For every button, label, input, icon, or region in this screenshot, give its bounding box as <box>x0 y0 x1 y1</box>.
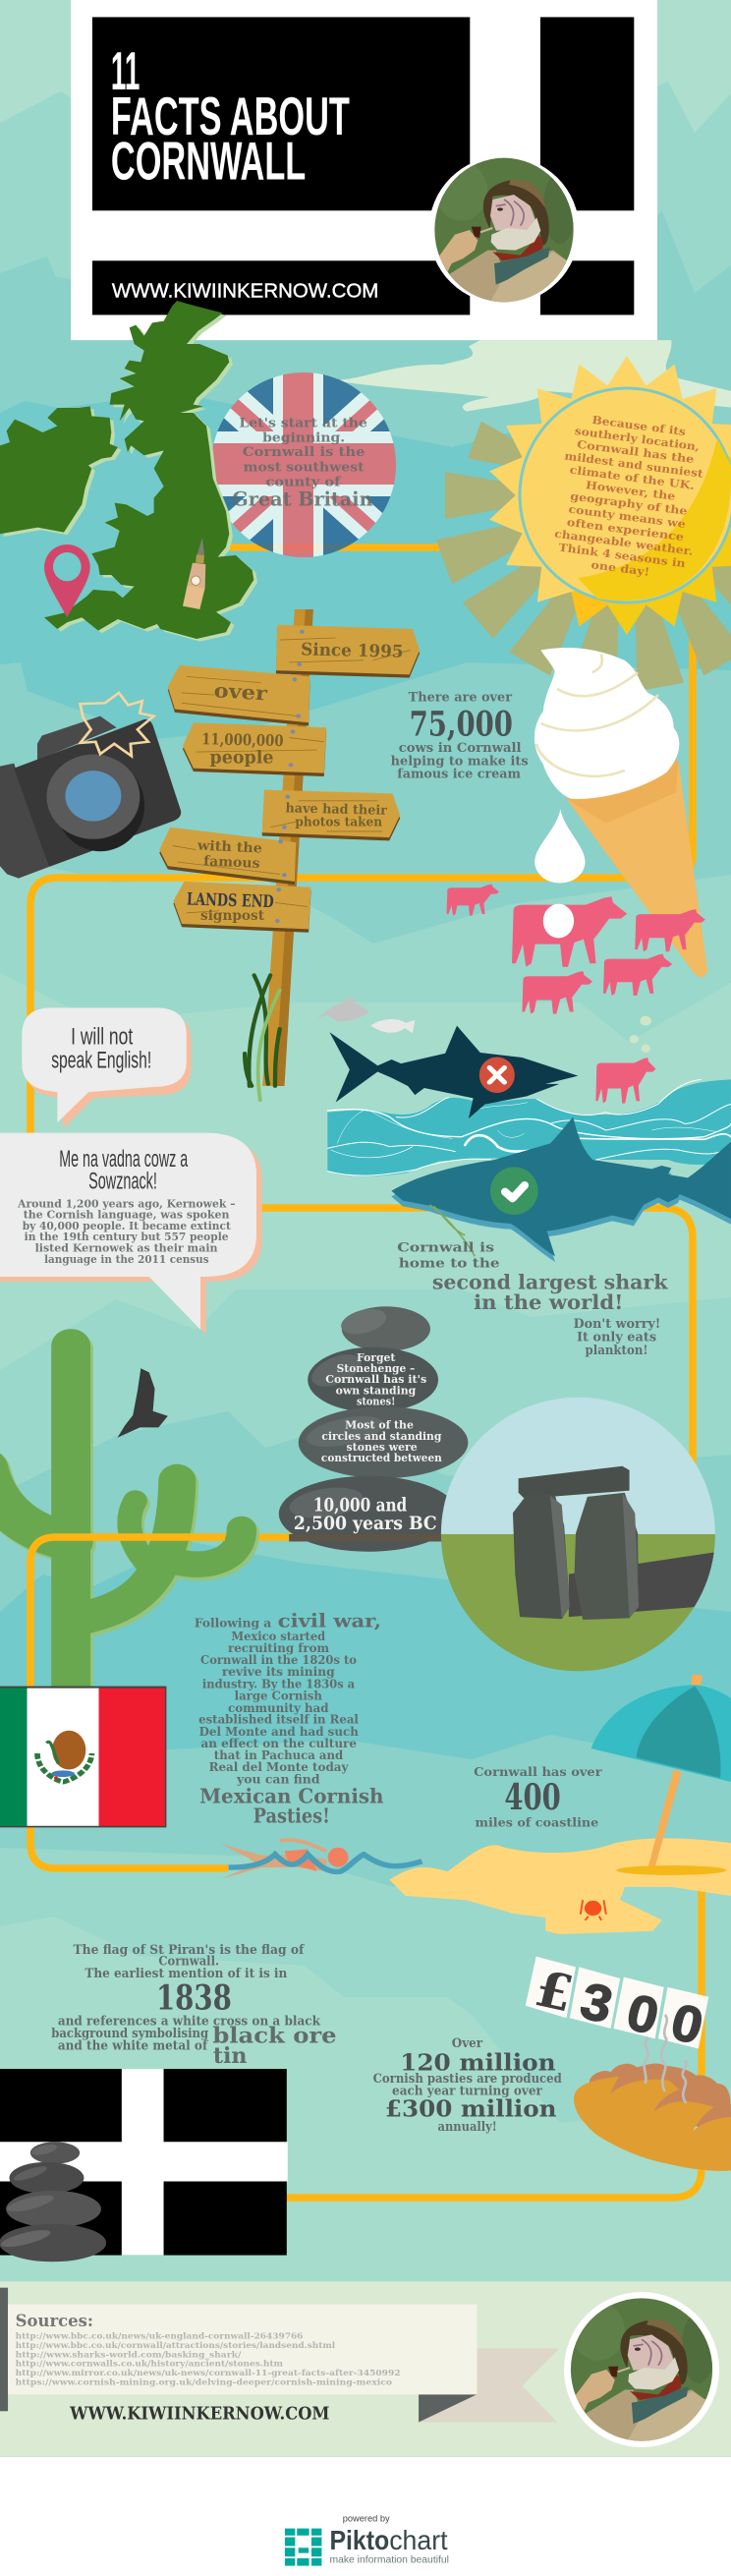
pasties text: Cornish pasties are produced <box>373 2071 562 2087</box>
speech bubble: I will not speak English <box>22 1007 192 1128</box>
mexico text: industry. By the 1830s a <box>202 1678 356 1691</box>
cows text: There are over <box>409 690 512 705</box>
sign: since 1995: Since 1995 <box>301 640 404 661</box>
plankton weed <box>429 1205 475 1256</box>
icon: Big Ben <box>183 538 205 609</box>
speech bubble: I will not speak English: speak English! <box>51 1048 151 1073</box>
stones text: stones! <box>357 1395 395 1407</box>
sign: over: over <box>213 679 268 706</box>
footer website: WWW.KIWIINKERNOW.COM <box>69 2404 329 2424</box>
pasties text: annually! <box>438 2119 497 2135</box>
icon: tick <box>490 1167 538 1215</box>
st pirans flag text: black ore <box>212 2023 337 2049</box>
st pirans flag text: background symbolising <box>51 2026 209 2041</box>
stones text: Stonehenge – <box>337 1362 415 1375</box>
wordmark: chart <box>389 2526 448 2556</box>
speech bubble: Me na vadna cowz a Sowznack: Sowznack! <box>88 1169 157 1194</box>
st pirans flag text: The flag of St Piran's is the flag of <box>73 1942 306 1958</box>
shark text: second largest shark <box>432 1271 668 1294</box>
st pirans flag text: and the white metal of <box>58 2038 208 2053</box>
mexico text: recruiting from <box>228 1642 329 1656</box>
basking shark with tick <box>391 1117 731 1262</box>
union flag text: beginning. <box>262 431 345 445</box>
coastline text <box>474 1765 603 1830</box>
Cornish language paragraph: the Cornish language, was spoken <box>24 1208 230 1221</box>
price cards: 300 pounds: 0 <box>621 1984 664 2045</box>
stones text: Cornwall has it's <box>325 1373 427 1386</box>
sun text: one day! <box>590 558 650 579</box>
st pirans flag text <box>51 1942 337 2069</box>
union flag text <box>232 416 373 511</box>
sources list <box>16 2312 401 2387</box>
mexico text <box>195 1610 384 1828</box>
union flag text: county of <box>265 475 341 489</box>
camera <box>0 693 181 879</box>
pasties text: £300 million <box>385 2095 557 2122</box>
mexico text: established itself in Real <box>198 1713 359 1727</box>
sign: have had their photos taken <box>262 790 400 840</box>
union flag text: most southwest <box>244 460 365 475</box>
sun text: changeable weather. <box>554 528 694 558</box>
orange line over cactus <box>30 1537 225 1573</box>
stones text: 2,500 years BC <box>294 1513 437 1534</box>
steam <box>645 2015 687 2103</box>
Cornish language paragraph: in the 19th century but 557 people <box>25 1231 229 1243</box>
sources list: http://www.mirror.co.uk/news/uk-news/cornwall-11-great-facts-after-3450992 <box>16 2369 401 2378</box>
mexico text: civil war, <box>278 1610 381 1631</box>
grass <box>245 975 280 1100</box>
wordmark: make information beautiful <box>329 2554 449 2565</box>
umbrella <box>591 1674 731 1867</box>
cows text: famous ice cream <box>397 767 521 781</box>
sign: over <box>168 665 310 726</box>
stones text: Most of the <box>345 1418 414 1431</box>
title: CORNWALL <box>111 132 306 191</box>
union flag text: Let's start at the <box>239 416 367 430</box>
icon: eagle emblem <box>37 1731 91 1782</box>
footer portrait <box>564 2292 719 2447</box>
stones text: 10,000 and <box>313 1495 407 1516</box>
shark text: Cornwall is <box>397 1240 494 1255</box>
ribbon <box>419 2348 559 2422</box>
st pirans flag text: tin <box>213 2042 248 2069</box>
price cards: 300 pounds <box>526 1957 708 2055</box>
waves <box>327 1079 731 1176</box>
shark text: Don't worry! <box>574 1317 660 1332</box>
mexico text: Cornwall in the 1820s to <box>200 1654 357 1668</box>
coastline text: miles of coastline <box>476 1815 598 1830</box>
coastline text: 400 <box>504 1777 561 1818</box>
crab <box>581 1900 606 1920</box>
wordmark: Pikto <box>329 2526 389 2556</box>
sun text: county means we <box>568 503 687 531</box>
st pirans flag <box>0 2069 288 2261</box>
mexico text: Mexican Cornish <box>199 1785 384 1808</box>
sun text: Think 4 seasons in <box>558 542 686 570</box>
sun text: However, the <box>585 479 676 503</box>
title <box>111 42 350 191</box>
sign: with the famous: famous <box>203 853 260 872</box>
coastline text: Cornwall has over <box>474 1765 603 1779</box>
wordmark <box>329 2526 449 2565</box>
title: FACTS ABOUT <box>111 86 350 146</box>
mexico text: large Cornish <box>235 1689 322 1703</box>
st pirans flag text: 1838 <box>156 1977 232 2018</box>
sign: with the famous <box>159 828 296 885</box>
orange route line <box>30 547 702 2198</box>
mexico text: revive its mining <box>222 1666 335 1680</box>
Cornish language paragraph: by 40,000 people. It became extinct <box>23 1220 231 1232</box>
speech bubble: Me na vadna cowz a Sowznack: Me na vadna cowz a <box>59 1147 189 1173</box>
sign: 11,000,000 people: people <box>210 748 274 768</box>
mexico text: Following a <box>195 1617 272 1631</box>
cows text: cows in Cornwall <box>399 741 522 756</box>
footer panel <box>0 2281 731 2457</box>
union flag text: Cornwall is the <box>243 445 366 460</box>
sign: 11,000,000 people <box>183 722 326 776</box>
mexico text: Pasties! <box>253 1804 330 1828</box>
sun text: geography of the <box>570 489 688 518</box>
icon: map pin <box>44 544 90 617</box>
sources list: http://www.bbc.co.uk/cornwall/attractions/stories/landsend.shtml <box>16 2341 336 2351</box>
pasties text: Over <box>452 2036 483 2051</box>
stones text: own standing <box>336 1384 416 1397</box>
sign: lands end signpost: LANDS END <box>187 889 274 912</box>
sun text <box>550 411 709 584</box>
mexico text: you can find <box>236 1773 320 1787</box>
cactus <box>0 1345 245 1699</box>
sun text: Because of its <box>591 414 687 438</box>
post <box>262 609 313 1086</box>
stones text: circles and standing <box>321 1430 441 1443</box>
sources list: http://www.sharks-world.com/basking_shark/ <box>16 2351 242 2360</box>
beach sand <box>389 1674 731 1934</box>
mexican flag <box>0 1687 166 1827</box>
pasties text <box>373 2036 562 2135</box>
small stones stack <box>0 2142 106 2261</box>
mexico text: Mexico started <box>231 1631 325 1644</box>
sign: have had their photos taken: have had their <box>285 801 388 819</box>
shark text: plankton! <box>585 1344 648 1357</box>
sources list: http://www.bbc.co.uk/news/uk-england-cornwall-26439766 <box>16 2332 303 2341</box>
sun text: mildest and sunniest <box>564 449 704 481</box>
pasties text: 120 million <box>400 2049 556 2076</box>
stonehenge circle <box>438 1395 718 1673</box>
speech bubble: Me na vadna cowz a Sowznack <box>0 1133 262 1335</box>
union flag circle <box>212 372 396 557</box>
shark with cross <box>329 1026 578 1118</box>
piktochart logo <box>285 2514 449 2566</box>
shark text: home to the <box>399 1256 500 1271</box>
sun text: southerly location, <box>574 425 701 453</box>
header banner <box>71 0 657 340</box>
mexico text: Real del Monte today <box>209 1761 349 1775</box>
st pirans flag text: and references a white cross on a black <box>58 2014 321 2029</box>
portrait: fisherman <box>428 155 580 306</box>
signpost <box>159 609 420 1100</box>
price cards: 300 pounds: 0 <box>665 1994 708 2055</box>
cows text: 75,000 <box>410 704 513 744</box>
fish <box>317 997 415 1033</box>
shark text <box>397 1240 668 1357</box>
sources list: http://www.cornwalls.co.uk/history/ancient/stones.htm <box>16 2360 284 2370</box>
sign: since 1995 <box>276 625 420 678</box>
bird <box>118 1368 168 1438</box>
sun text: Cornwall has the <box>576 438 695 466</box>
title: 11 <box>111 42 140 101</box>
shark text: It only eats <box>577 1330 656 1345</box>
piktochart logo: powered by <box>343 2514 390 2523</box>
stones text <box>294 1351 442 1534</box>
map of Britain and Ireland <box>0 301 257 642</box>
mexico text: community had <box>228 1702 329 1716</box>
Cornish language paragraph <box>17 1197 236 1266</box>
sources list: https://www.cornish-mining.org.uk/delving-deeper/cornish-mining-mexico <box>16 2378 392 2387</box>
swimmer <box>220 1840 422 1879</box>
st pirans flag text: Cornwall. <box>158 1954 219 1969</box>
st pirans flag text: The earliest mention of it is in <box>84 1966 288 1981</box>
website address: WWW.KIWIINKERNOW.COM <box>112 279 378 302</box>
pasties text: each year turning over <box>392 2084 543 2098</box>
cows text <box>391 690 529 781</box>
Cornish language paragraph: listed Kernowek as their main <box>35 1241 218 1254</box>
speech bubble: I will not speak English: I will not <box>71 1024 133 1050</box>
standing stones stack <box>279 1304 468 1552</box>
sun <box>436 356 731 691</box>
sources list: Sources: <box>16 2312 93 2331</box>
sign: lands end signpost <box>174 882 310 933</box>
sign: with the famous: with the <box>197 837 262 856</box>
stones text: stones were <box>347 1441 418 1454</box>
sun shadow rays <box>436 422 731 691</box>
mexico text: that in Pachuca and <box>214 1749 343 1763</box>
pasty <box>574 2063 731 2171</box>
sign: lands end signpost: signpost <box>200 908 264 924</box>
sign: have had their photos taken: photos taken <box>295 815 383 830</box>
sun text: often experience <box>566 516 685 544</box>
ice cream cone <box>534 648 707 978</box>
price cards: 300 pounds: 3 <box>575 1973 618 2034</box>
sun rays <box>485 356 731 635</box>
shark text: in the world! <box>474 1291 623 1315</box>
icon: flash <box>81 693 154 756</box>
union flag text: Great Britain <box>232 488 373 511</box>
sign: 11,000,000 people: 11,000,000 <box>201 729 284 750</box>
sun text: climate of the UK. <box>569 464 696 492</box>
icon: piktochart mark <box>285 2529 321 2566</box>
cloud <box>326 340 731 412</box>
cows text: helping to make its <box>391 754 529 769</box>
herd of cows <box>447 884 705 1104</box>
milk drop <box>534 809 585 884</box>
mexico text: an effect on the culture <box>201 1738 357 1750</box>
stones text: Forget <box>357 1351 396 1364</box>
Cornish language paragraph: language in the 2011 census <box>44 1253 209 1266</box>
Cornish language paragraph: Around 1,200 years ago, Kernowek – <box>17 1197 236 1210</box>
icon: cross <box>479 1058 515 1093</box>
price cards: 300 pounds: £ <box>530 1961 579 2024</box>
stones text: constructed between <box>321 1452 442 1464</box>
mexico text: Del Monte and had such <box>199 1726 359 1740</box>
